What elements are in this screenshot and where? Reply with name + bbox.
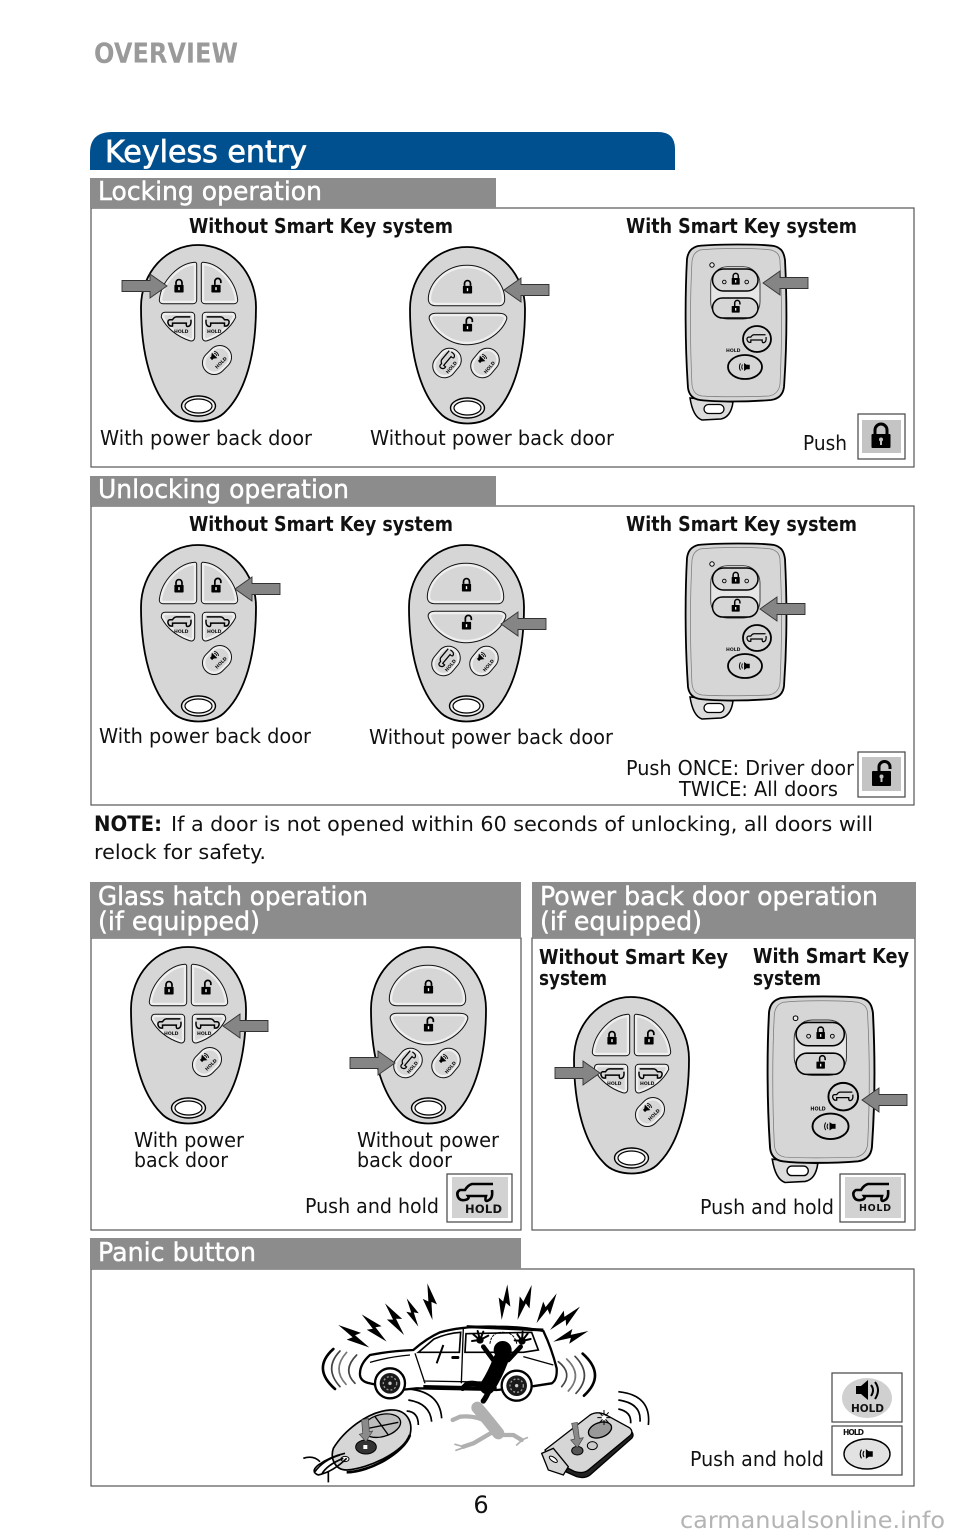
caption: with power back door: With power	[134, 1128, 245, 1152]
subheading: without smart key: Without Smart Key system	[189, 214, 453, 238]
icon: panic hold button	[832, 1373, 902, 1422]
subheading: with smart key: system	[753, 966, 821, 990]
arrow	[555, 1061, 600, 1085]
panel: unlocking operation	[90, 475, 914, 805]
arrow	[235, 577, 280, 601]
note text	[94, 812, 873, 864]
heading: power back door operation: (if equipped)	[540, 907, 702, 937]
subheading: without smart key	[539, 945, 728, 990]
caption: with power back door: With power back door	[100, 426, 313, 450]
arrow	[223, 1014, 268, 1038]
key fob: two button	[410, 247, 525, 424]
icon: smart key panic button: HOLD	[843, 1428, 864, 1437]
caption: with power back door: With power back door	[99, 724, 312, 748]
car	[360, 1327, 557, 1401]
instruction: push and hold: Push and hold	[690, 1447, 824, 1471]
icon: panic hold button: HOLD	[851, 1403, 884, 1415]
key fob: two button	[409, 545, 524, 722]
wheels	[375, 1368, 405, 1398]
sound waves: smart key	[618, 1392, 649, 1425]
key fob: four button	[141, 245, 256, 422]
arrow	[504, 278, 549, 302]
sound waves: car	[323, 1349, 595, 1396]
instruction: push: Push	[803, 431, 847, 455]
heading: power back door operation	[532, 882, 916, 938]
illustration: alarm with car, figure and key fobs	[303, 1282, 649, 1482]
instruction: push and hold: Push and hold	[305, 1194, 439, 1218]
banner: Keyless entry: Keyless entry	[105, 135, 307, 170]
note text: NOTE:	[94, 812, 162, 836]
caption: without power back door	[357, 1128, 500, 1172]
smart key	[686, 244, 786, 420]
key fob with keyring	[303, 1410, 411, 1482]
caption: without power back door: back door	[357, 1148, 453, 1172]
subheading: without smart key: Without Smart Key system	[189, 512, 453, 536]
subheading: with smart key: With Smart Key system	[626, 214, 857, 238]
icon: smart key panic button	[832, 1426, 902, 1475]
panel: panic button	[90, 1238, 914, 1486]
figure	[463, 1331, 531, 1401]
icon: back door hold button	[840, 1174, 905, 1222]
note text: If a door is not opened within 60 seconds of unlocking, all doors will	[171, 812, 873, 836]
icon: lock button	[858, 414, 905, 459]
arrow	[862, 1088, 907, 1112]
heading: unlocking operation: Unlocking operation	[98, 475, 349, 505]
caption: without power back door: Without power back door	[370, 426, 615, 450]
banner: Keyless entry	[90, 132, 675, 170]
page section title: OVERVIEW	[94, 36, 238, 70]
smart key	[768, 996, 874, 1182]
sound waves: key fob	[407, 1389, 442, 1425]
panel: power back door operation	[532, 882, 916, 1230]
icon: hatch hold button: HOLD	[465, 1202, 502, 1216]
subheading: without smart key: system	[539, 966, 607, 990]
instruction: push and hold: Push and hold	[700, 1195, 834, 1219]
arrow	[763, 271, 808, 295]
subheading: with smart key	[753, 944, 909, 990]
page number: 6	[473, 1491, 489, 1519]
panel: glass hatch operation	[90, 882, 521, 1230]
subheading: with smart key: With Smart Key	[753, 944, 909, 968]
lightning bolts	[334, 1282, 590, 1353]
caption: without power back door: Without power	[357, 1128, 500, 1152]
heading: unlocking operation	[90, 475, 496, 506]
heading: locking operation	[90, 177, 496, 208]
caption: with power back door: back door	[134, 1148, 229, 1172]
arrow	[501, 612, 546, 636]
heading: panic button: Panic button	[98, 1238, 256, 1268]
panel: locking operation	[90, 177, 914, 467]
smart key	[686, 544, 786, 719]
key fob: four button	[131, 947, 246, 1124]
watermark: carmanualsonline.info	[680, 1508, 945, 1534]
arrow	[760, 597, 805, 621]
heading: power back door operation: Power back door operation	[540, 882, 878, 912]
heading: glass hatch operation	[90, 882, 521, 938]
instruction: push once / twice: TWICE: All doors	[678, 777, 838, 801]
subheading: with smart key: With Smart Key system	[626, 512, 857, 536]
figure shadow	[453, 1408, 527, 1450]
key fob: four button	[141, 545, 256, 722]
subheading: without smart key: Without Smart Key	[539, 945, 728, 969]
caption: without power back door: Without power back door	[369, 725, 614, 749]
caption: with power back door	[134, 1128, 245, 1172]
icon: back door hold button: HOLD	[859, 1203, 891, 1214]
note text: relock for safety.	[94, 840, 266, 864]
smart key	[542, 1410, 633, 1478]
key fob: four button	[574, 997, 689, 1174]
instruction: push once / twice: Push ONCE: Driver door	[626, 756, 855, 780]
heading: glass hatch operation: Glass hatch operation	[98, 882, 368, 912]
arrow	[350, 1051, 395, 1075]
icon: unlock button	[858, 752, 905, 797]
heading: locking operation: Locking operation	[98, 177, 322, 207]
icon: hatch hold button	[447, 1174, 512, 1222]
key fob: two button	[371, 947, 486, 1124]
instruction: push once / twice	[626, 756, 855, 801]
arrow	[122, 274, 167, 298]
heading: panic button	[90, 1238, 521, 1269]
heading: glass hatch operation: (if equipped)	[98, 907, 260, 937]
